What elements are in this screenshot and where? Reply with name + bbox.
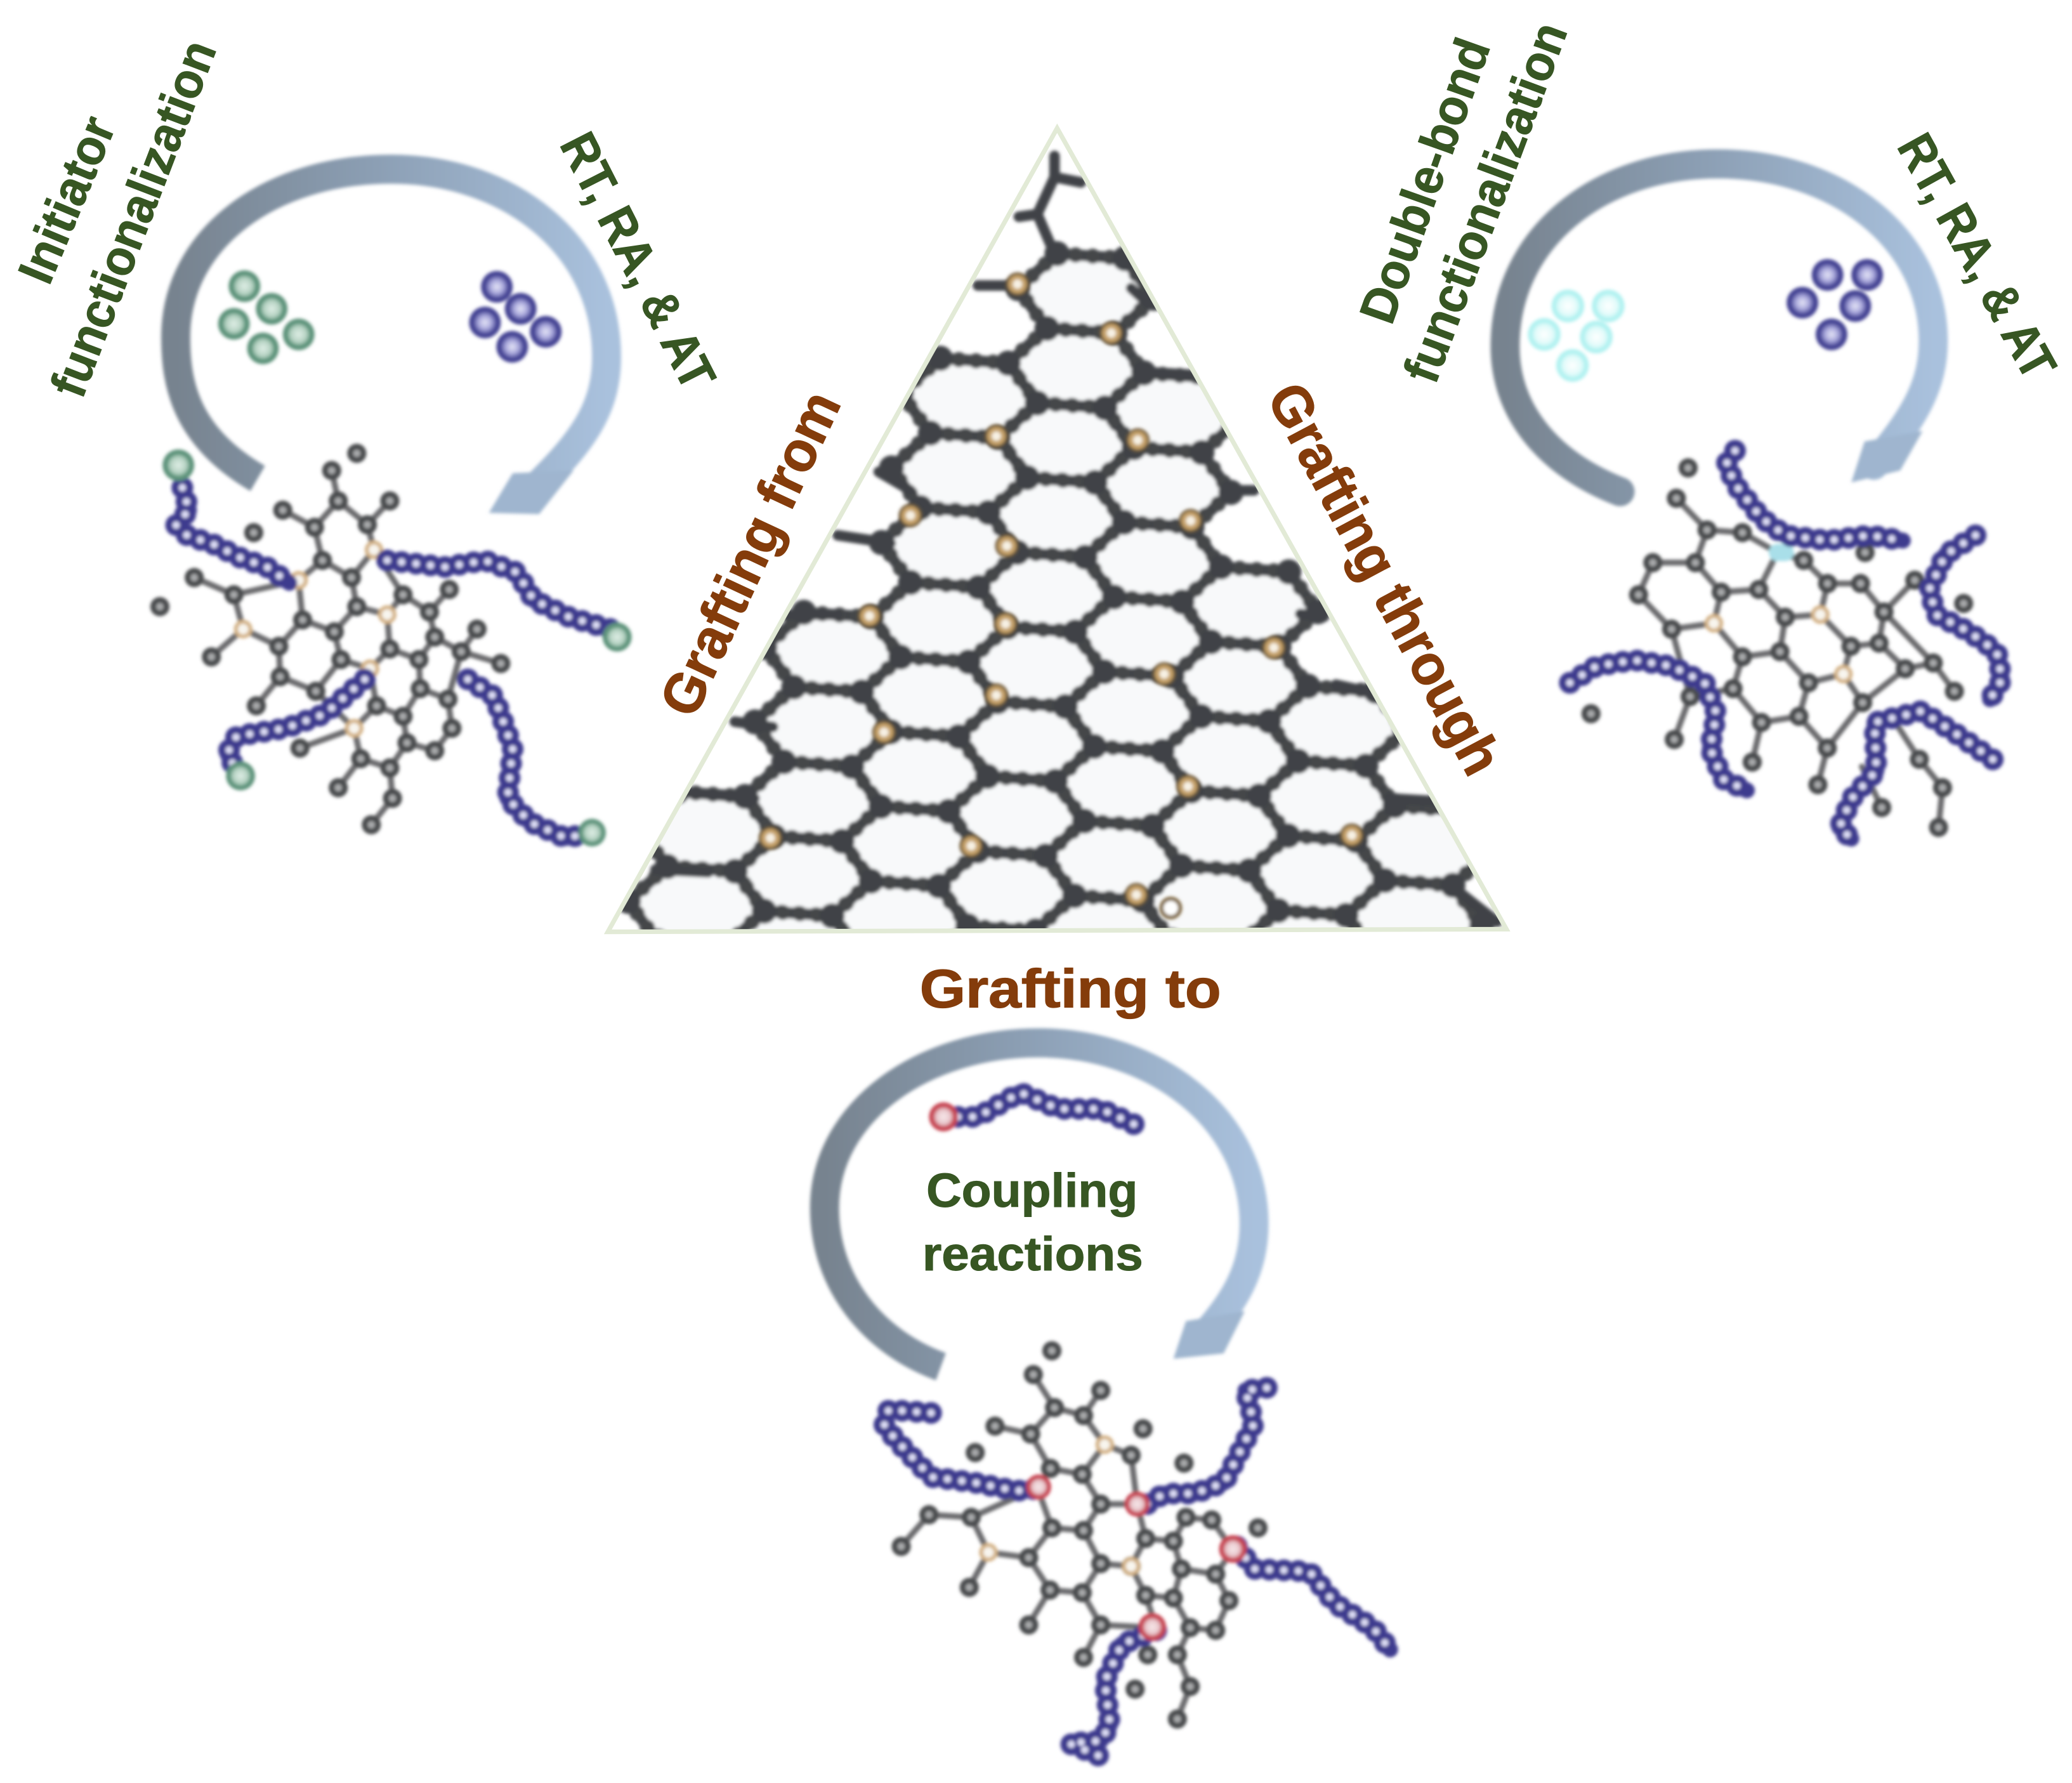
label: RT, RA, & AT (left): RT, RA, & AT [549, 123, 727, 398]
polymer chains coupled to sheet [884, 1093, 1390, 1756]
label: Double-bond functionalization: functionalization [1393, 15, 1578, 390]
label: Double-bond functionalization: Double-bond [1348, 31, 1501, 330]
triangle outline [608, 128, 1507, 932]
panel: grafting to scheme [825, 1043, 1390, 1756]
label: Initiator functionalization: Initiator [7, 109, 126, 291]
monomer cluster: purple beads [1787, 259, 1883, 350]
arrow: cycle bottom [825, 1043, 1254, 1367]
graphene sheet fragment [1591, 468, 1964, 827]
red coupling sites [929, 1102, 1247, 1641]
graphene sheet fragment [160, 453, 501, 825]
polymer chains attached to sheet [1570, 451, 2002, 839]
tan dopant atoms [770, 284, 1352, 918]
polymer chains grown from sheet [176, 488, 610, 838]
heading: Grafting from: Grafting from [647, 381, 853, 725]
panel: grafting from scheme [160, 169, 632, 846]
monomer cluster: green initiator beads [218, 270, 315, 364]
green chain end beads [162, 449, 632, 846]
label: Coupling reactions: Coupling [926, 1164, 1138, 1217]
heading: Grafting to: Grafting to [920, 959, 1221, 1019]
monomer cluster: cyan double-bond beads [1528, 289, 1625, 382]
heading: Grafting through: Grafting through [1256, 372, 1515, 785]
panel: central graphene triangle [608, 128, 1507, 990]
arrow: cycle right [1505, 164, 1933, 492]
label: Coupling reactions [922, 1164, 1143, 1280]
graphene sheet fragment [902, 1351, 1258, 1719]
honeycomb lattice [628, 156, 1497, 990]
label: Initiator functionalization: functionalization [39, 32, 227, 404]
monomer cluster: purple beads [469, 271, 561, 363]
label: Coupling reactions: reactions [922, 1227, 1143, 1280]
panel: grafting through scheme [1505, 164, 2002, 839]
arrow: cycle left [176, 169, 607, 514]
